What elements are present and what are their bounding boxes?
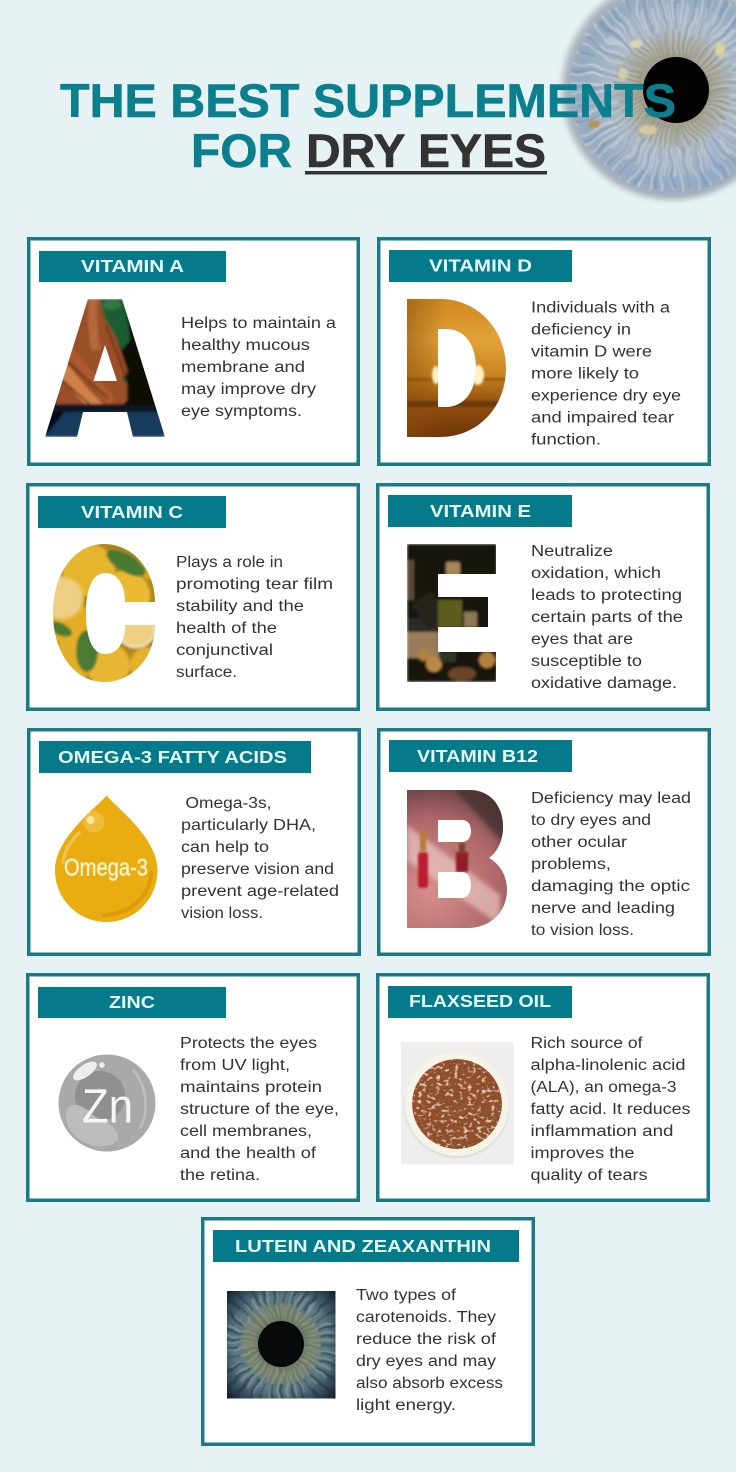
- text: vitamin D: Individuals with a: [531, 300, 670, 316]
- text: vitamin B12: nerve and leading: [531, 900, 675, 917]
- text: lutein and zeaxanthin: also absorb excess: [356, 1375, 503, 1392]
- panel: vitamin B12: [379, 730, 709, 954]
- text: omega-3: Omega-3s,: [186, 795, 272, 812]
- icon: letter C with lemons: [53, 544, 155, 682]
- text: vitamin D: deficiency in: [531, 322, 631, 338]
- text: flaxseed oil: alpha-linolenic acid: [530, 1057, 686, 1074]
- text: omega-3: prevent age-related: [181, 883, 339, 900]
- title: FOR: [191, 124, 292, 177]
- text: zinc: cell membranes,: [180, 1123, 312, 1140]
- text: vitamin D: vitamin D were: [531, 344, 652, 360]
- panel: vitamin A: [29, 239, 358, 464]
- panel: vitamin D: [379, 239, 709, 464]
- text: lutein and zeaxanthin: carotenoids. They: [356, 1309, 496, 1326]
- text: lutein and zeaxanthin: light energy.: [356, 1397, 456, 1414]
- text: vitamin C: health of the: [176, 620, 277, 637]
- text: vitamin C: surface.: [176, 664, 237, 681]
- text: vitamin E: oxidation, which: [531, 565, 661, 582]
- text: omega-3: can help to: [181, 839, 269, 856]
- text: zinc: from UV light,: [180, 1057, 290, 1074]
- heading: flaxseed oil: FLAXSEED OIL: [409, 991, 551, 1011]
- heading: vitamin E: [388, 495, 572, 527]
- text: vitamin A: eye symptoms.: [181, 403, 302, 420]
- heading: vitamin E: VITAMIN E: [430, 501, 531, 521]
- title: DRY EYES: [306, 124, 546, 177]
- text: vitamin D: and impaired tear: [531, 410, 674, 426]
- text: vitamin B12: damaging the optic: [531, 878, 690, 895]
- text: zinc: and the health of: [180, 1145, 317, 1162]
- text: omega-3: particularly DHA,: [181, 817, 316, 834]
- text: zinc: [180, 1035, 339, 1184]
- text: zinc: the retina.: [180, 1167, 260, 1184]
- icon: omega-3 oil drop: Omega-3: [64, 854, 148, 882]
- text: zinc: Protects the eyes: [180, 1035, 317, 1052]
- heading: vitamin B12: [389, 740, 572, 772]
- text: vitamin E: eyes that are: [531, 631, 633, 648]
- icon: letter A with carrots: [45, 299, 167, 437]
- heading: vitamin D: [389, 250, 572, 282]
- title: THE BEST SUPPLEMENTS: [60, 74, 676, 127]
- heading: zinc: [38, 987, 226, 1018]
- text: flaxseed oil: (ALA), an omega-3: [530, 1079, 676, 1096]
- text: flaxseed oil: [530, 1035, 691, 1184]
- text: lutein and zeaxanthin: reduce the risk of: [356, 1331, 497, 1348]
- text: vitamin B12: problems,: [531, 856, 611, 873]
- icon: omega-3 oil drop: [55, 796, 158, 922]
- icon: bowl of flaxseed: [401, 1042, 514, 1164]
- text: vitamin A: Helps to maintain a: [181, 315, 336, 332]
- heading: lutein and zeaxanthin: LUTEIN AND ZEAXANTHIN: [235, 1236, 491, 1256]
- text: omega-3: vision loss.: [181, 905, 263, 922]
- panel: zinc: [28, 975, 358, 1200]
- text: vitamin C: conjunctival: [176, 642, 273, 659]
- heading: vitamin C: [38, 496, 226, 528]
- text: flaxseed oil: quality of tears: [530, 1167, 648, 1184]
- icon: letter D with sunset: [407, 299, 507, 437]
- text: vitamin B12: Deficiency may lead: [531, 790, 691, 807]
- text: vitamin A: healthy mucous: [181, 337, 310, 354]
- text: vitamin C: Plays a role in: [176, 554, 283, 571]
- panel: flaxseed oil: [378, 975, 708, 1200]
- heading: vitamin A: [39, 251, 226, 282]
- text: vitamin E: leads to protecting: [531, 587, 682, 604]
- text: vitamin A: membrane and: [181, 359, 305, 376]
- heading: vitamin C: VITAMIN C: [81, 502, 183, 522]
- text: vitamin B12: other ocular: [531, 834, 627, 851]
- text: vitamin E: [531, 543, 683, 692]
- heading: vitamin D: VITAMIN D: [429, 256, 532, 276]
- heading: lutein and zeaxanthin: [213, 1230, 519, 1262]
- text: vitamin E: certain parts of the: [531, 609, 683, 626]
- heading: vitamin B12: VITAMIN B12: [417, 746, 538, 766]
- text: vitamin A: may improve dry: [181, 381, 316, 398]
- heading: zinc: ZINC: [109, 992, 155, 1012]
- heading: omega-3 fatty acids: OMEGA-3 FATTY ACIDS: [58, 747, 287, 767]
- text: vitamin B12: [531, 790, 691, 939]
- text: vitamin C: [176, 554, 333, 681]
- text: omega-3: preserve vision and: [181, 861, 334, 878]
- text: vitamin E: susceptible to: [531, 653, 642, 670]
- text: vitamin A: [181, 315, 336, 420]
- panel: vitamin E: [378, 485, 708, 709]
- heading: omega-3 fatty acids: [39, 741, 311, 773]
- text: lutein and zeaxanthin: [356, 1287, 503, 1414]
- heading: flaxseed oil: [388, 986, 572, 1018]
- text: vitamin B12: to dry eyes and: [531, 812, 651, 829]
- heading: vitamin A: VITAMIN A: [81, 256, 184, 276]
- text: vitamin D: experience dry eye: [531, 388, 681, 404]
- text: flaxseed oil: improves the: [530, 1145, 634, 1162]
- text: vitamin D: more likely to: [531, 366, 639, 382]
- icon: letter B with ampoules: [407, 790, 510, 928]
- icon: letter E with oil and nuts: [407, 544, 497, 682]
- icon: zinc sphere: Zn: [82, 1080, 133, 1134]
- icon: iris close-up: [227, 1291, 336, 1398]
- text: vitamin E: oxidative damage.: [531, 675, 677, 692]
- text: flaxseed oil: fatty acid. It reduces: [530, 1101, 691, 1118]
- iris image: top right eye: [561, 0, 736, 200]
- text: zinc: maintains protein: [180, 1079, 322, 1096]
- text: zinc: structure of the eye,: [180, 1101, 339, 1118]
- text: flaxseed oil: inflammation and: [530, 1123, 674, 1140]
- panel: omega-3 fatty acids: [29, 730, 359, 954]
- text: vitamin B12: to vision loss.: [531, 922, 634, 939]
- text: vitamin C: stability and the: [176, 598, 304, 615]
- text: vitamin C: promoting tear film: [176, 576, 333, 593]
- panel: lutein and zeaxanthin: [203, 1219, 533, 1444]
- text: vitamin D: function.: [531, 432, 601, 448]
- text: flaxseed oil: Rich source of: [530, 1035, 643, 1052]
- text: vitamin E: Neutralize: [531, 543, 613, 560]
- title: [60, 74, 676, 177]
- icon: zinc sphere: [58, 1054, 156, 1152]
- panel: vitamin C: [28, 485, 358, 709]
- text: omega-3: [181, 795, 339, 922]
- text: vitamin D: [531, 300, 681, 448]
- text: lutein and zeaxanthin: dry eyes and may: [356, 1353, 496, 1370]
- text: lutein and zeaxanthin: Two types of: [356, 1287, 457, 1304]
